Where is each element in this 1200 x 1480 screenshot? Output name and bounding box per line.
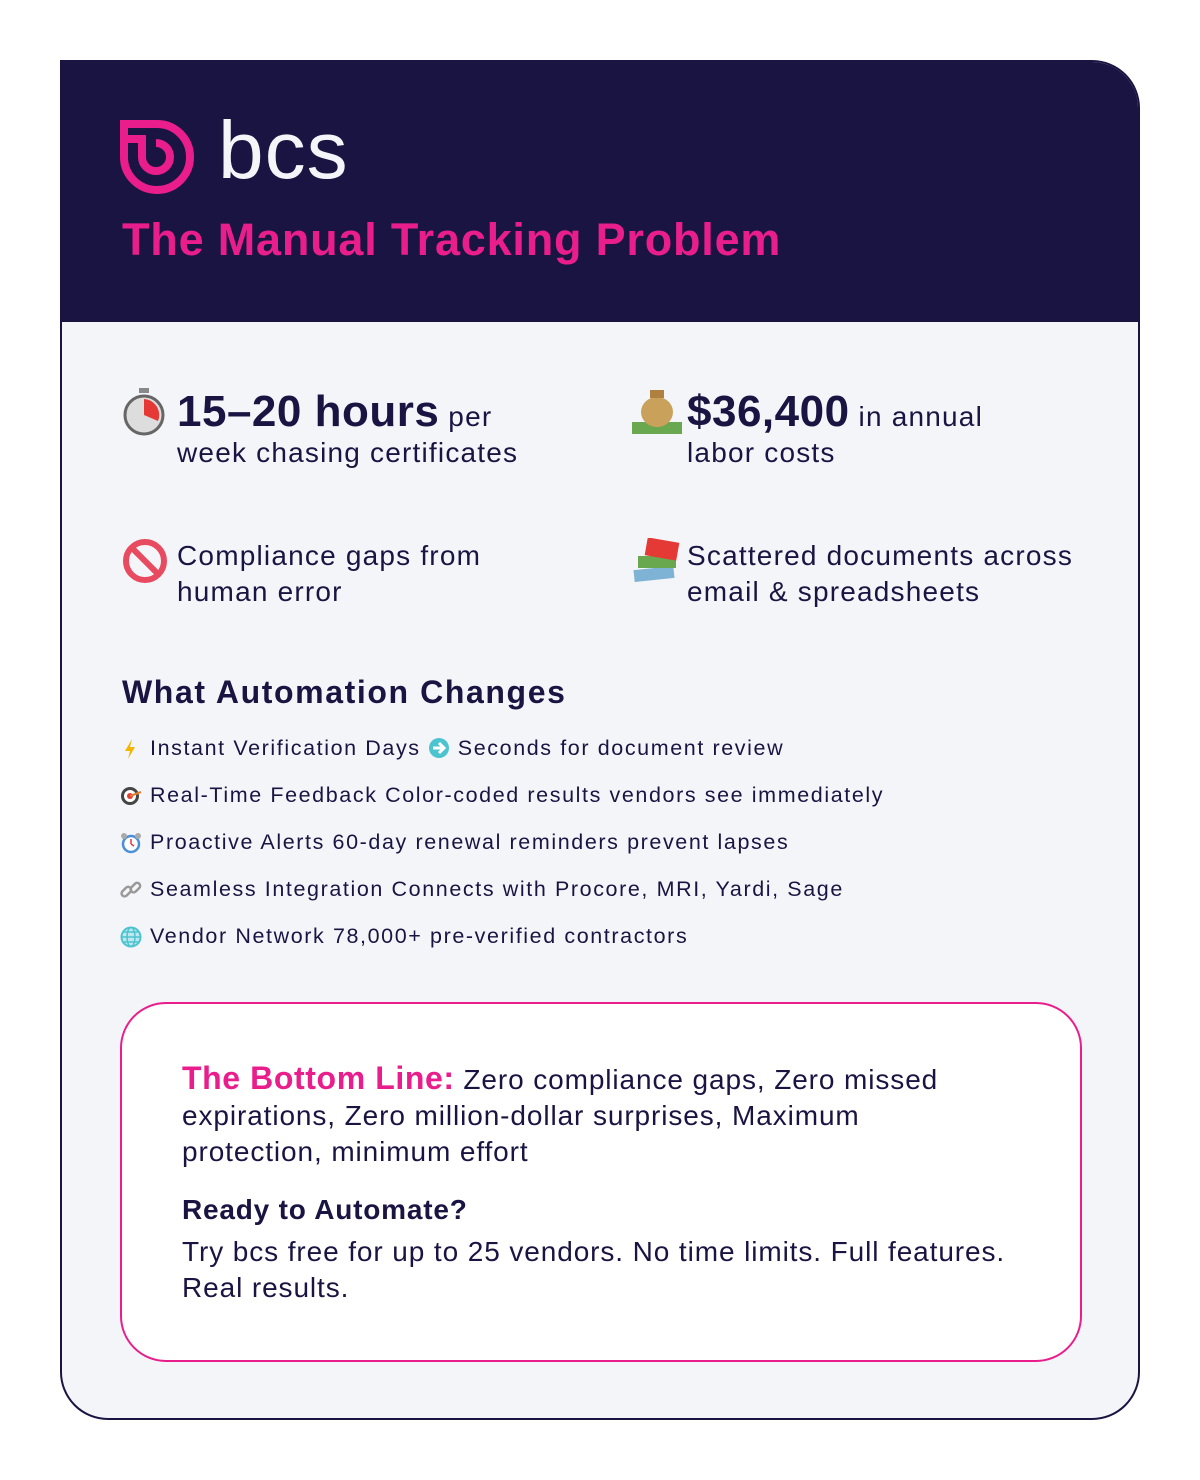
- stat: compliance: human error: [177, 576, 343, 607]
- stat: costs: $36,400 in annual: [687, 387, 983, 436]
- list item: instant: Instant Verification Days Seconds for document review: [150, 736, 784, 760]
- stat: costs: [632, 387, 983, 468]
- stat: scattered: [634, 538, 1073, 607]
- logo: [120, 105, 349, 196]
- cta text: [182, 1236, 1005, 1303]
- stat: hours: 15–20 hours per: [177, 387, 492, 436]
- logo: bcs: [218, 105, 349, 196]
- callout: bottom line: [120, 1002, 1082, 1362]
- cta text: Try bcs free for up to 25 vendors. No time limits. Full features.: [182, 1236, 1005, 1267]
- stat: costs: labor costs: [687, 437, 836, 468]
- stat: scattered: email & spreadsheets: [687, 576, 980, 607]
- title: The Manual Tracking Problem: [122, 214, 781, 265]
- heading: automation: What Automation Changes: [122, 674, 566, 710]
- stat: hours: week chasing certificates: [177, 437, 518, 468]
- stat: hours: [124, 387, 518, 468]
- stat: scattered: Scattered documents across: [687, 540, 1073, 571]
- list item: network: Vendor Network 78,000+ pre-verified contractors: [150, 924, 688, 948]
- header band: [62, 62, 1138, 322]
- bottom line text: protection, minimum effort: [182, 1136, 529, 1167]
- stat: compliance: Compliance gaps from: [177, 540, 481, 571]
- bottom line text: The Bottom Line: Zero compliance gaps, Zero missed: [182, 1060, 938, 1096]
- cta text: Real results.: [182, 1272, 349, 1303]
- bottom line text: expirations, Zero million-dollar surprises, Maximum: [182, 1100, 860, 1131]
- list item: alerts: Proactive Alerts 60-day renewal reminders prevent lapses: [150, 830, 789, 854]
- stat: compliance: [123, 539, 481, 607]
- cta heading: Ready to Automate?: [182, 1194, 468, 1225]
- bottom line text: [182, 1060, 938, 1167]
- list item: feedback: Real-Time Feedback Color-coded results vendors see immediately: [150, 783, 884, 807]
- list item: integration: Seamless Integration Connects with Procore, MRI, Yardi, Sage: [150, 877, 844, 901]
